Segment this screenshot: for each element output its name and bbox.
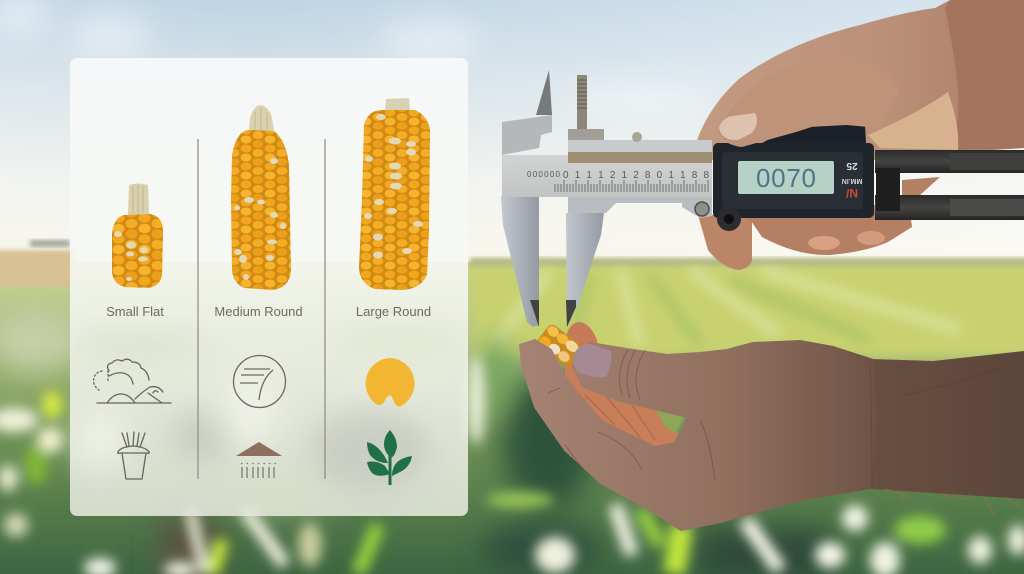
background: clouds — [0, 0, 710, 116]
lower fingers of upper hand — [698, 177, 940, 270]
caliper: lcd reading: 0070 — [756, 163, 816, 193]
lower hand: fingers — [565, 322, 685, 450]
caliper: jaw tips — [530, 300, 576, 327]
caliper: rear rods — [875, 150, 1024, 220]
panel blurred backdrop texture — [70, 322, 470, 510]
corn: large round — [359, 98, 430, 290]
caliper: upper left jaw — [502, 70, 552, 155]
caliper: mirrored number: 25 — [846, 160, 858, 171]
caliper: slider top — [568, 132, 712, 163]
label: large round: Large Round — [356, 304, 431, 319]
knob — [717, 207, 741, 231]
divider lines — [198, 139, 325, 479]
panel: corn size comparison — [70, 58, 470, 516]
arm shading — [870, 352, 1024, 498]
upper hand back — [697, 0, 1024, 160]
caliper: red mark: N/ — [845, 186, 858, 200]
icon: pot with sprouts — [118, 432, 149, 479]
icon: green plant — [367, 430, 412, 485]
label: small flat: Small Flat — [106, 304, 164, 319]
background: sky — [0, 0, 1024, 265]
label: medium round: Medium Round — [214, 304, 303, 319]
caliper: units: MM.IN — [842, 177, 862, 184]
icon: yellow sun — [366, 358, 415, 407]
hand creases — [548, 350, 1000, 485]
background: field — [0, 240, 1024, 574]
background: foliage bokeh — [0, 310, 1024, 574]
icon: roof with rain — [236, 442, 282, 478]
caliper: lower left jaw — [501, 196, 539, 327]
arm hair — [885, 489, 1024, 518]
corn kernels between caliper jaws — [535, 322, 584, 369]
lower hand and forearm — [520, 340, 1024, 530]
thumbnail — [719, 113, 757, 140]
thumbnail — [573, 344, 611, 377]
corn: small flat — [112, 184, 163, 288]
caliper: threaded post — [568, 75, 604, 140]
caliper: digital body — [713, 124, 874, 231]
caliper: scale digits: 0 1 1 1 2 1 2 8 0 1 1 8 8 — [563, 170, 709, 181]
caliper: lower sliding jaw — [566, 213, 604, 327]
caliper: lcd screen — [738, 161, 834, 194]
caliper: scale numbers: 000000 — [527, 170, 561, 179]
caliper: tick marks — [555, 180, 708, 192]
upper thumb — [718, 55, 900, 147]
caliper: lower slider — [568, 197, 712, 218]
icon: wind circle — [234, 356, 286, 408]
panel background — [70, 58, 468, 516]
caliper — [501, 70, 1024, 327]
corn: medium round — [231, 105, 291, 290]
icon: soil and cloud — [94, 359, 171, 403]
caliper: screw — [695, 202, 709, 216]
caliper: scale beam — [502, 155, 712, 197]
